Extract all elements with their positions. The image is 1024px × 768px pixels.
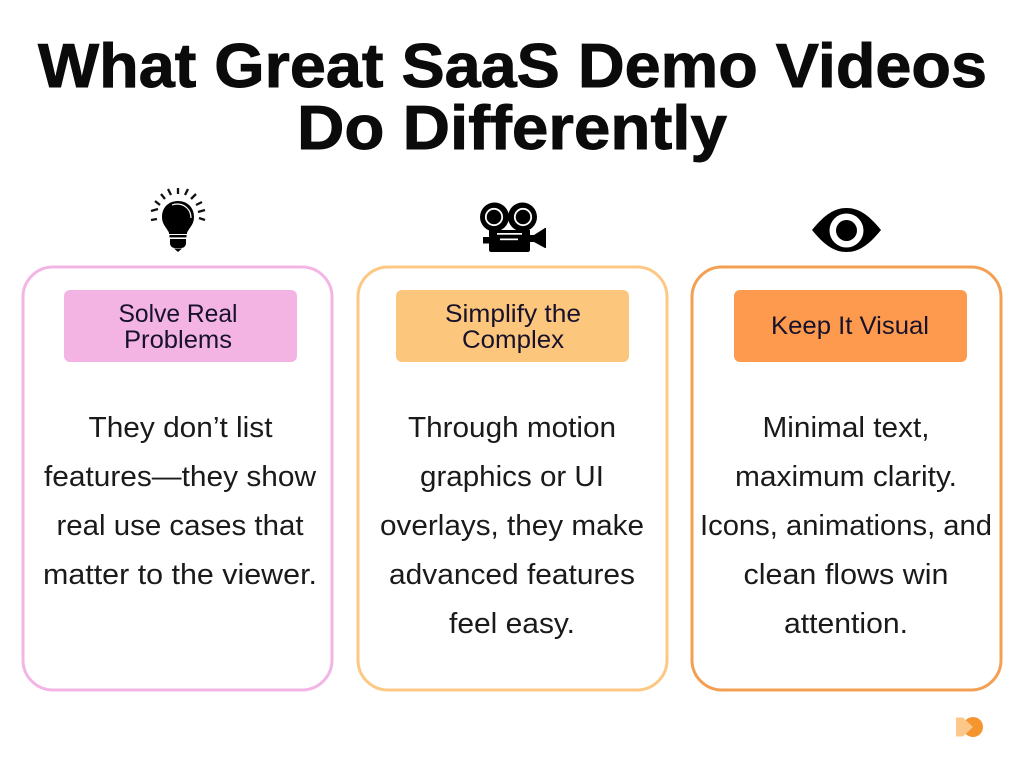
body text: solve real problems: real use cases that (56, 510, 304, 542)
panel: simplify the complex (358, 267, 667, 690)
badge: solve real problems: Problems (124, 326, 232, 354)
title: Do Differently (297, 94, 728, 163)
body text: solve real problems (43, 412, 317, 591)
badge: keep it visual (734, 290, 967, 362)
icon: brand logo (956, 717, 983, 737)
body text: keep it visual: maximum clarity. (735, 461, 957, 493)
body text: simplify the complex: overlays, they make (380, 510, 644, 542)
badge: solve real problems: Solve Real (118, 300, 238, 328)
body text: simplify the complex: advanced features (389, 559, 635, 591)
badge: keep it visual: Keep It Visual (771, 312, 929, 340)
body text: simplify the complex (380, 412, 644, 640)
body text: keep it visual: attention. (784, 608, 908, 640)
panel: solve real problems (23, 267, 332, 690)
icon: light bulb (151, 188, 205, 252)
body text: simplify the complex: feel easy. (449, 608, 575, 640)
badge: simplify the complex (396, 290, 629, 362)
icon: eye (812, 208, 881, 252)
body text: solve real problems: features—they show (44, 461, 316, 493)
title (38, 32, 987, 163)
body text: solve real problems: They don’t list (88, 412, 273, 444)
icon: film camera (480, 202, 546, 252)
panel: keep it visual (692, 267, 1001, 690)
badge: solve real problems (64, 290, 297, 362)
body text: simplify the complex: graphics or UI (420, 461, 604, 493)
body text: keep it visual: clean flows win (744, 559, 948, 591)
title: What Great SaaS Demo Videos (38, 32, 987, 101)
body text: simplify the complex: Through motion (408, 412, 616, 444)
body text: keep it visual (700, 412, 992, 640)
badge: simplify the complex: Simplify the (445, 300, 581, 328)
body text: keep it visual: Minimal text, (762, 412, 930, 444)
body text: keep it visual: Icons, animations, and (700, 510, 992, 542)
badge: simplify the complex: Complex (462, 326, 565, 354)
body text: solve real problems: matter to the viewer. (43, 559, 317, 591)
